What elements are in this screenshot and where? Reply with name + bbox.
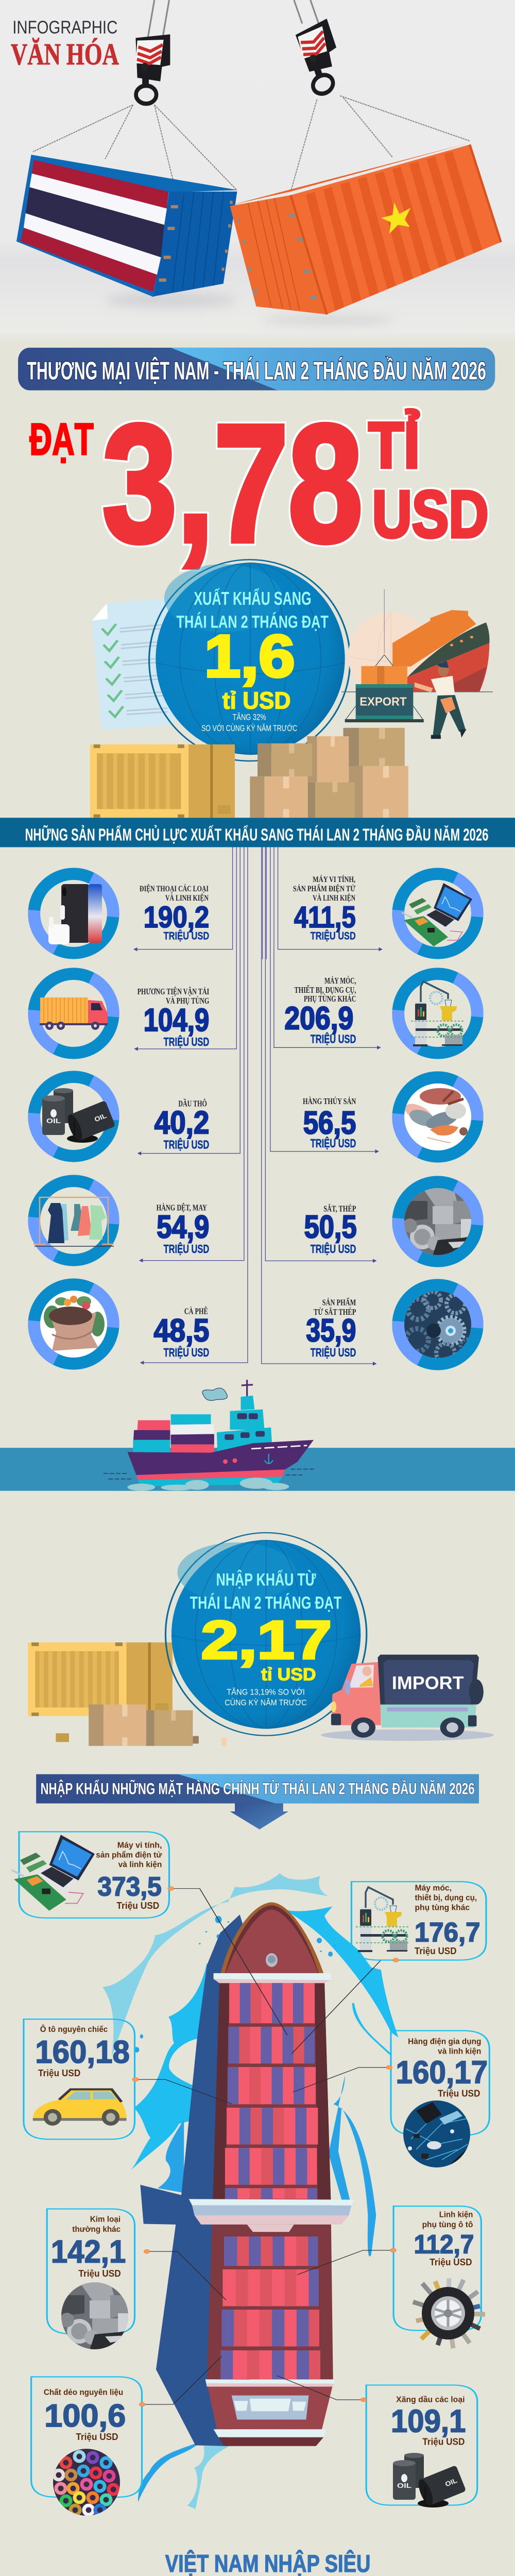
callout: computers: Máy vi tính,: [117, 1841, 162, 1850]
value text: PHỤ TÙNG KHÁC: [304, 994, 356, 1004]
value text: [304, 1204, 357, 1256]
icon: circuit board: [403, 2100, 471, 2168]
headline total: 3,78 tỉ USD: 3,78: [102, 390, 363, 577]
value text: TRIỆU USD: [311, 1137, 356, 1150]
callout: fuels: [360, 2385, 477, 2505]
product: machinery: [284, 960, 491, 1066]
icon: globe badge: [165, 1533, 367, 1736]
chains: [33, 96, 470, 192]
headline total: 3,78 tỉ USD: ĐẠT: [29, 414, 94, 464]
value text: VÀ LINH KIỆN: [165, 893, 209, 902]
callout: metals: 142,1: [51, 2234, 126, 2269]
callout: plastics: Chất dẻo nguyên liệu: [44, 2388, 123, 2397]
callout: computers: sản phẩm điện tử: [96, 1851, 162, 1859]
value text: 40,2: [154, 1105, 209, 1141]
icon: phone and earbuds: [21, 860, 127, 967]
callout: metals: Triệu USD: [78, 2268, 121, 2279]
import headline text: CÙNG KỲ NĂM TRƯỚC: [225, 1698, 307, 1707]
callout: plastics: Triệu USD: [76, 2431, 118, 2442]
value text: SẮT, THÉP: [323, 1204, 356, 1214]
container rows: [221, 1983, 320, 2379]
ship hull and containers: [189, 1902, 354, 2446]
icon: yellow star: [381, 202, 410, 234]
callout: plastics: [31, 2377, 145, 2497]
value text: [157, 1203, 209, 1256]
export headline text: XUẤT KHẨU SANG: [194, 587, 312, 609]
callout: metals: Kim loại: [90, 2215, 121, 2224]
icon: crane hooks: [135, 19, 348, 104]
callout: fuels: Xăng dầu các loại: [396, 2395, 465, 2404]
icon: yellow container: [90, 744, 235, 818]
icon: tire and auto parts: [413, 2278, 485, 2348]
value text: 54,9: [157, 1209, 209, 1245]
value text: MÁY MÓC,: [324, 976, 356, 986]
icon: export ship, container and worker: [341, 589, 493, 739]
callout: auto parts: Triệu USD: [430, 2257, 472, 2267]
product: seafood: [303, 1071, 484, 1163]
icon: fish and shrimp: [392, 1071, 484, 1163]
import headline text: tỉ USD: [261, 1665, 316, 1684]
icon: export ship, container and worker: EXPORT: [359, 694, 407, 708]
callout: auto parts: phụ tùng ô tô: [422, 2220, 473, 2229]
value text: [154, 1098, 209, 1151]
value text: TRIỆU USD: [311, 1032, 356, 1045]
value text: [153, 1307, 209, 1359]
diagram: container ship from above with water splash: [102, 1873, 399, 2509]
value text: HÀNG DỆT, MAY: [157, 1203, 207, 1213]
callout: metals: [47, 2209, 150, 2334]
export headline text: SO VỚI CÙNG KỲ NĂM TRƯỚC: [201, 723, 297, 733]
callout: machinery: Máy móc,: [415, 1884, 452, 1893]
icon: coffee sack: [28, 1278, 119, 1370]
value text: 104,9: [144, 1002, 209, 1038]
value text: 48,5: [153, 1312, 209, 1348]
value text: [303, 1096, 356, 1150]
product: steel goods: [306, 1272, 491, 1378]
icon: truck: [21, 960, 127, 1066]
callout: home appliances: Hàng điện gia dụng: [408, 2037, 481, 2046]
value text: 35,9: [306, 1312, 356, 1348]
value text: TRIỆU USD: [164, 1242, 209, 1256]
title bar: [18, 348, 495, 391]
icon: laptop: [11, 1835, 95, 1911]
icon: oil barrels: [21, 1063, 127, 1170]
value text: TRIỆU USD: [311, 1346, 356, 1359]
icon: laptop: [385, 860, 491, 967]
callout: computers: 373,5: [97, 1871, 162, 1902]
callout: machinery: 176,7: [415, 1917, 480, 1947]
export headline text: THÁI LAN 2 THÁNG ĐẠT: [176, 612, 329, 632]
value text: [140, 884, 209, 942]
icon: cardboard boxes: [250, 728, 408, 818]
icon: machine: [356, 1887, 408, 1952]
connector lines with arrows: [133, 847, 383, 1366]
value text: CÀ PHÊ: [184, 1307, 208, 1316]
value text: 411,5: [294, 900, 356, 934]
callout: cars: Triệu USD: [38, 2067, 80, 2078]
product: textiles: [21, 1167, 209, 1274]
icon: machine: [385, 960, 491, 1066]
value text: 206,9: [284, 1001, 353, 1037]
value text: [306, 1297, 356, 1359]
callout: cars: 160,18: [35, 2034, 130, 2070]
water splash: [102, 1873, 399, 2509]
callout: auto parts: 112,7: [414, 2230, 474, 2259]
callout: metals: thường khác: [72, 2225, 121, 2234]
callout: computers: [19, 1832, 174, 1918]
import headline text: [190, 1569, 341, 1707]
callout: cars: [24, 2019, 139, 2139]
icon: oil barrels: [393, 2453, 466, 2507]
icon: clothes rack: [21, 1167, 127, 1274]
value text: 190,2: [144, 900, 209, 934]
section band: export products: [0, 818, 515, 847]
callout lines: [138, 1889, 393, 2404]
product: crude oil: [21, 1063, 209, 1170]
import headline text: 2,17: [201, 1610, 332, 1670]
product: computers: [293, 860, 491, 967]
icon: globe badge: [149, 560, 350, 761]
value text: ĐIỆN THOẠI CÁC LOẠI: [140, 884, 209, 893]
callout: machinery: Triệu USD: [415, 1945, 457, 1956]
product: vehicles: [21, 960, 209, 1066]
product: iron and steel: [304, 1168, 491, 1275]
icon: plastic beads: [53, 2448, 121, 2516]
callout: machinery: thiết bị, dụng cụ,: [415, 1893, 477, 1902]
callout: fuels: Triệu USD: [422, 2436, 465, 2447]
callout: home appliances: Triệu USD: [438, 2088, 480, 2099]
Thailand flag container: [16, 155, 238, 297]
value text: VÀ PHỤ TÙNG: [166, 996, 209, 1006]
icon: checklist document: [92, 598, 174, 730]
logo: VĂN HÓA: [11, 38, 119, 71]
logo: INFOGRAPHIC: [12, 18, 117, 38]
headline total: 3,78 tỉ USD: USD: [372, 477, 488, 552]
icon: gears: [385, 1272, 491, 1378]
callout: plastics: 100,6: [44, 2398, 126, 2434]
export headline text: tỉ USD: [222, 688, 290, 714]
container ship on water: [0, 1380, 515, 1491]
hero: containers hanging from cranes: [0, 0, 515, 343]
icon: import truck: [321, 1655, 494, 1741]
icon: import truck: IMPORT: [392, 1673, 464, 1693]
callout: machinery: phụ tùng khác: [415, 1903, 470, 1912]
import headline text: TĂNG 13,19% SO VỚI: [227, 1687, 305, 1697]
product: coffee: [28, 1278, 209, 1370]
export headline text: [176, 587, 329, 733]
icon: steel bars: [385, 1168, 491, 1275]
callout: machinery: [351, 1882, 486, 1962]
value text: TRIỆU USD: [164, 929, 209, 942]
callout: fuels: 109,1: [391, 2403, 466, 2439]
callout: cars: Ô tô nguyên chiếc: [40, 2024, 108, 2034]
value text: MÁY VI TÍNH,: [313, 874, 355, 884]
export headline text: TĂNG 32%: [233, 712, 266, 722]
value text: HÀNG THỦY SẢN: [303, 1096, 356, 1106]
product: phones: [21, 860, 209, 967]
value text: 50,5: [304, 1209, 357, 1245]
callout: computers: và linh kiện: [118, 1860, 162, 1869]
headline total: 3,78 tỉ USD: TỈ: [369, 410, 420, 482]
section band: import goods with arrow: [36, 1774, 479, 1829]
value text: TRIỆU USD: [164, 1138, 209, 1151]
value text: TRIỆU USD: [164, 1346, 209, 1359]
icon: yellow car: [33, 2089, 127, 2126]
value text: SẢN PHẨM: [322, 1297, 356, 1307]
icon: steel bars: [60, 2282, 129, 2350]
callout: home appliances: [386, 2030, 489, 2136]
value text: [284, 976, 356, 1045]
value text: DẦU THÔ: [178, 1098, 207, 1108]
value text: PHƯƠNG TIỆN VẬN TẢI: [138, 987, 209, 996]
ship shadow: [140, 1914, 250, 2446]
import summary section: [28, 1533, 494, 1829]
logo: [11, 18, 119, 71]
Vietnam flag container: [230, 143, 501, 314]
icon: yellow container and boxes: [28, 1642, 227, 1746]
value text: TRIỆU USD: [311, 1242, 356, 1256]
value text: THIẾT BỊ, DỤNG CỤ,: [294, 985, 356, 995]
callout: computers: Triệu USD: [116, 1900, 159, 1911]
value text: [293, 874, 356, 942]
export headline text: 1,6: [204, 622, 295, 689]
callout: auto parts: [390, 2206, 481, 2330]
callout: auto parts: Linh kiện: [439, 2210, 473, 2219]
value text: TỪ SẮT THÉP: [314, 1307, 356, 1317]
value text: TRIỆU USD: [311, 929, 356, 942]
value text: [138, 987, 209, 1048]
import headline text: THÁI LAN 2 THÁNG ĐẠT: [190, 1592, 341, 1613]
value text: 56,5: [303, 1105, 356, 1141]
value text: VÀ LINH KIỆN: [313, 893, 355, 902]
callout: home appliances: và linh kiện: [438, 2047, 481, 2056]
import headline text: NHẬP KHẨU TỪ: [216, 1569, 316, 1589]
headline total: 3,78 tỉ USD: [29, 390, 488, 577]
value text: TRIỆU USD: [164, 1035, 209, 1048]
value text: SẢN PHẨM ĐIỆN TỬ: [293, 884, 356, 893]
export summary section: [90, 560, 493, 818]
